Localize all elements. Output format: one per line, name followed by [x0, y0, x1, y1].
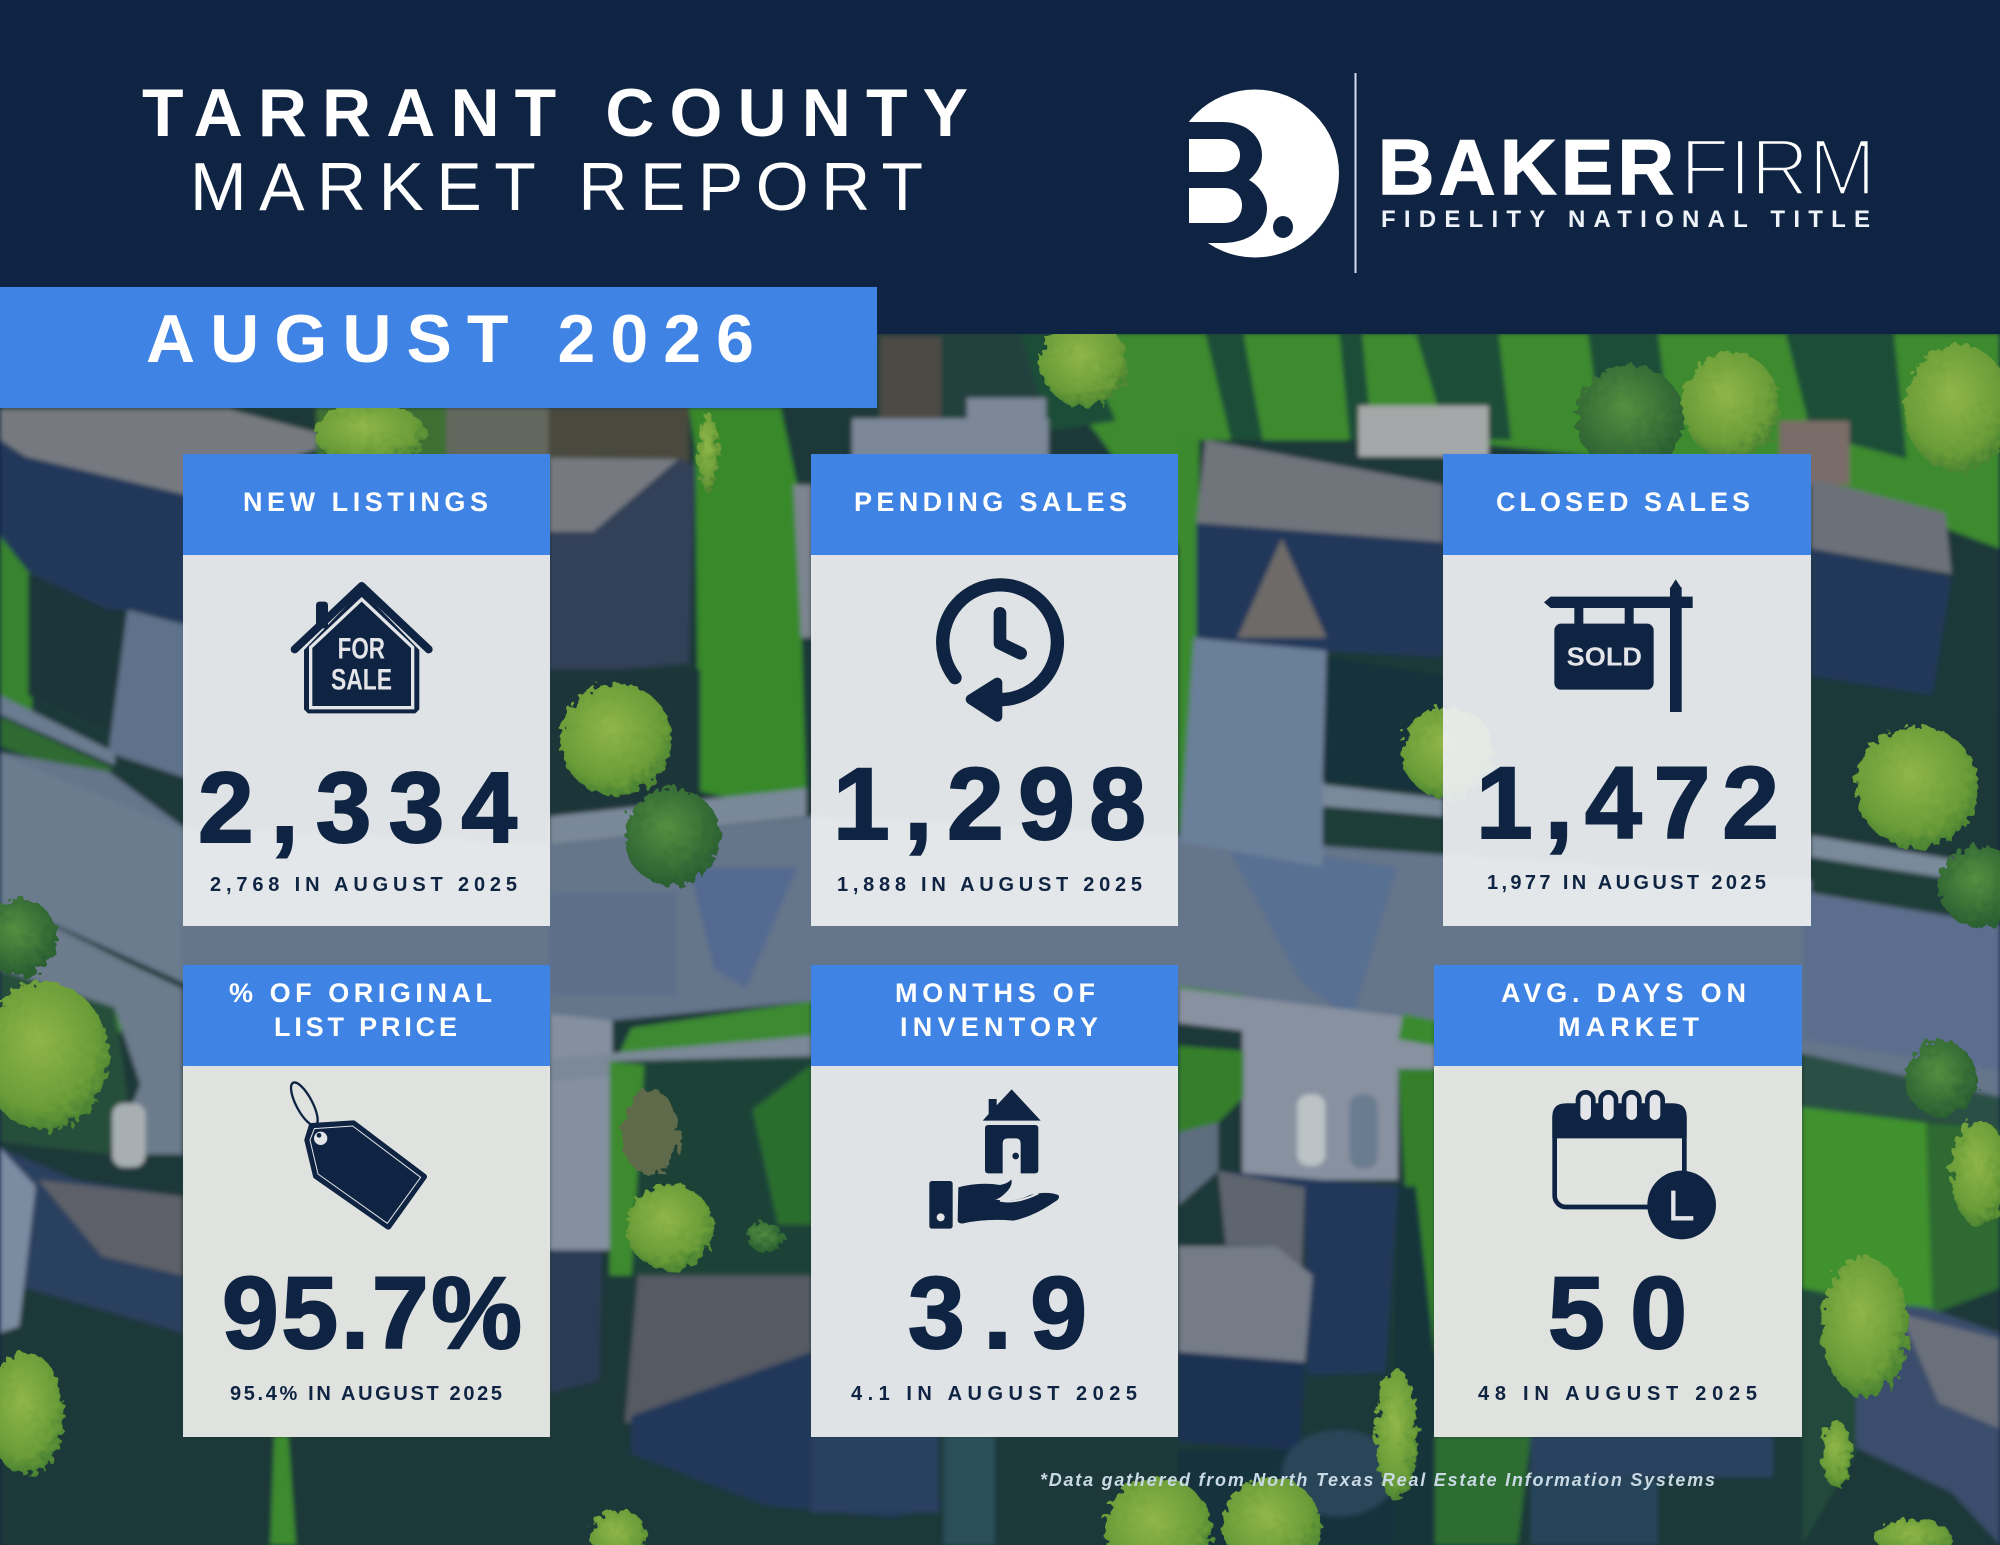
- heading: average days on market: AVG. DAYS ON: [1501, 978, 1746, 1008]
- logo wordmark: [1378, 123, 1876, 233]
- title: TARRANT COUNTY: [142, 75, 968, 151]
- heading: percent of original list price: [229, 978, 492, 1042]
- card: average days on market: [1434, 965, 1802, 1437]
- logo wordmark: FIDELITY NATIONAL TITLE: [1381, 206, 1870, 233]
- card: closed sales: [1443, 454, 1811, 926]
- header band: [0, 0, 2000, 334]
- heading: months of inventory: INVENTORY: [900, 1012, 1098, 1042]
- icon: calendar with clock: [1552, 1092, 1716, 1239]
- heading: average days on market: MARKET: [1558, 1012, 1700, 1042]
- title: MARKET REPORT: [190, 149, 923, 225]
- comparison: 95.4%: 95.4% IN AUGUST 2025: [230, 1383, 502, 1405]
- icon: price tag: [286, 1079, 424, 1227]
- heading: percent of original list price: LIST PRICE: [274, 1012, 457, 1042]
- title: [142, 75, 968, 225]
- comparison: 48: 48 IN AUGUST 2025: [1478, 1383, 1757, 1405]
- icon: sold sign: [1544, 579, 1693, 712]
- value: 50: 50: [1548, 1256, 1687, 1370]
- card: months of inventory: [811, 965, 1178, 1437]
- comparison: 1,888: 1,888 IN AUGUST 2025: [837, 874, 1142, 896]
- card: pending sales: [811, 454, 1178, 926]
- heading: new listings: NEW LISTINGS: [243, 487, 488, 517]
- comparison: 1,977: 1,977 IN AUGUST 2025: [1487, 872, 1766, 894]
- card: percent of original list price: [183, 965, 550, 1437]
- icon: for sale house: SALE: [331, 663, 392, 696]
- heading: months of inventory: MONTHS OF: [895, 978, 1095, 1008]
- logo divider: [1354, 73, 1356, 273]
- heading: pending sales: PENDING SALES: [854, 487, 1127, 517]
- background: aerial photo of a neighbourhood: [0, 320, 2000, 1545]
- value: 1,472: 1,472: [1476, 746, 1779, 860]
- footnote: data source: *Data gathered from North Texas Real Estate Information Systems: [1040, 1470, 1715, 1490]
- logo: [1165, 73, 1876, 273]
- icon: for sale house: [295, 586, 429, 713]
- logo wordmark: BAKER: [1378, 123, 1674, 211]
- icon: hand holding house: [929, 1089, 1059, 1229]
- icon: sold sign: SOLD: [1567, 642, 1642, 672]
- value: 1,298: 1,298: [833, 747, 1146, 861]
- comparison: 4.1: 4.1 IN AUGUST 2025: [851, 1383, 1137, 1405]
- month banner: AUGUST 2026: [146, 301, 754, 377]
- logo wordmark: FIRM: [1680, 123, 1876, 213]
- value: 2,334: 2,334: [198, 752, 517, 864]
- heading: closed sales: CLOSED SALES: [1496, 487, 1750, 517]
- comparison: 2,768: 2,768 IN AUGUST 2025: [210, 874, 517, 896]
- logo mark: B in circle: [1165, 90, 1339, 258]
- icon: clock with return arrow: [943, 585, 1057, 717]
- card: new listings: [183, 454, 550, 926]
- month banner: [0, 287, 877, 408]
- icon: for sale house: FOR: [338, 632, 385, 665]
- value: 3.9: 3.9: [908, 1256, 1087, 1370]
- value: 95.7%: 95.7%: [222, 1256, 522, 1370]
- heading: average days on market: [1501, 978, 1746, 1042]
- heading: months of inventory: [895, 978, 1098, 1042]
- heading: percent of original list price: % OF ORIGINAL: [229, 978, 492, 1008]
